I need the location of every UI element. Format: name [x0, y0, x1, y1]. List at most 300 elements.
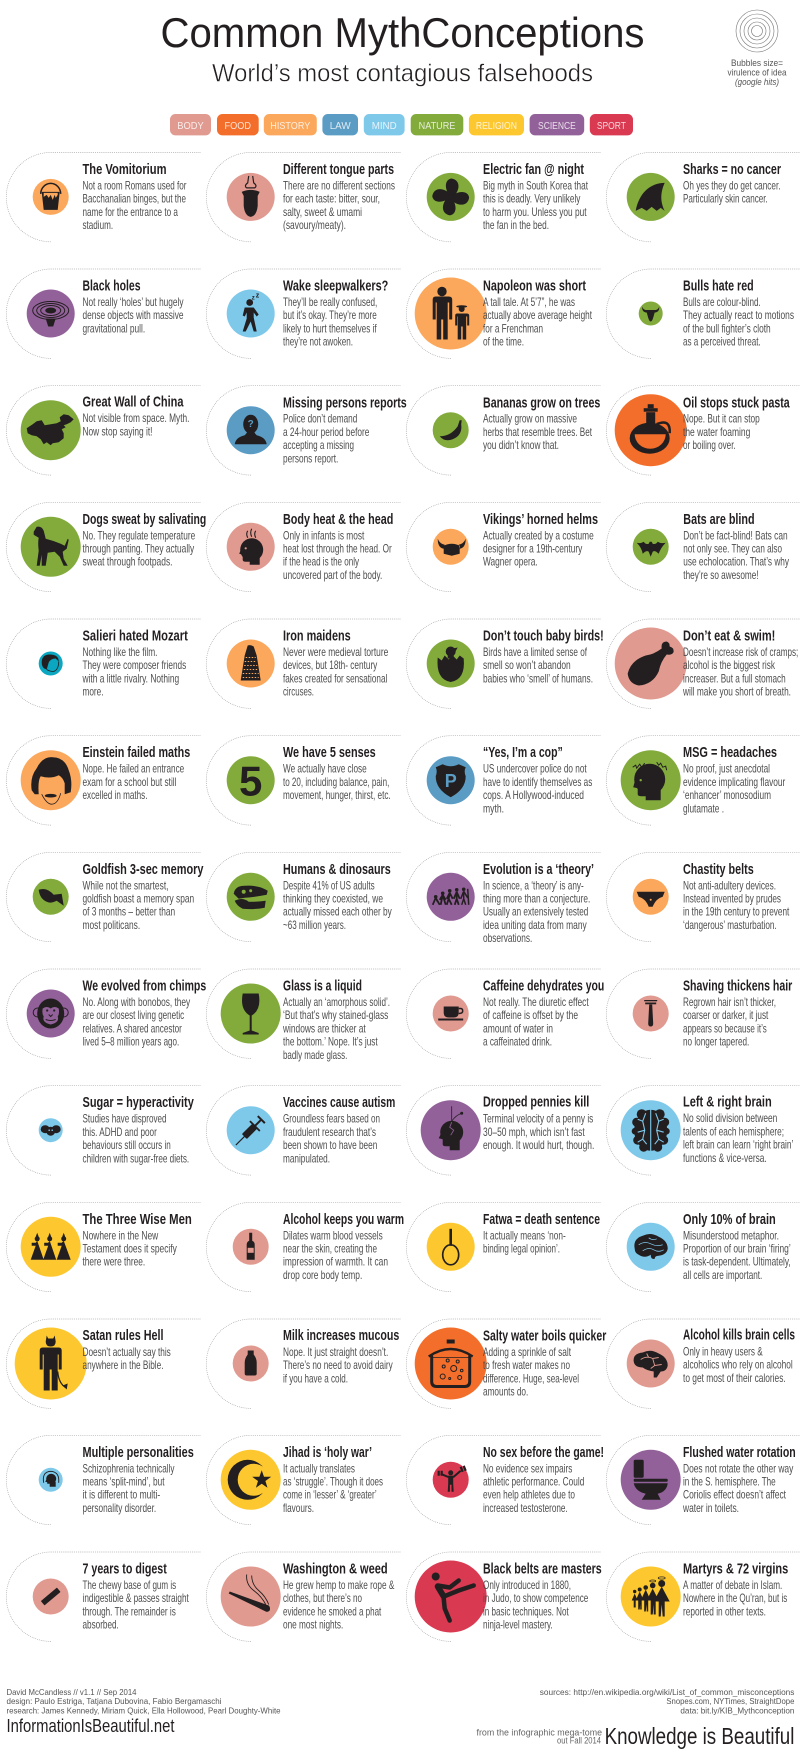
text block: exam for a school but still: [82, 775, 176, 789]
text block: fraudulent research that’s: [283, 1125, 376, 1139]
card: Oil stops stuck pasta: [606, 386, 800, 475]
text block: smell so won’t abandon: [483, 658, 571, 672]
text block: personality disorder.: [82, 1501, 156, 1515]
heading: Caffeine dehydrates you: [483, 978, 604, 994]
icon: toilet: [621, 1450, 681, 1510]
footer: credits: design: Paulo Estriga, Tatjana Dubovina, Fabio Bergamaschi: [6, 1696, 222, 1706]
text block: difference. Huge, sea-level: [483, 1371, 579, 1385]
card: 7 years to digest: [6, 1552, 201, 1641]
text block: Bacchanalian binges, but the: [82, 192, 186, 206]
icon: sleepwalker: z: [252, 296, 255, 302]
text block: increased testosterone.: [483, 1501, 568, 1515]
icon: noose: [427, 1223, 475, 1271]
text block: come in ‘lesser’ & ‘greater’: [283, 1488, 377, 1502]
text block: to 20, including balance, pain,: [283, 775, 389, 789]
text block: [683, 178, 780, 206]
text block: Groundless fears based on: [283, 1112, 380, 1126]
text block: they’re not awoken.: [283, 335, 353, 349]
text block: clothes, but there’s no: [283, 1591, 362, 1605]
footer: site name: InformationIsBeautiful.net: [6, 1716, 174, 1736]
card: We have 5 senses: [206, 736, 401, 825]
text block: likely to hurt themselves if: [283, 321, 377, 335]
card: Dogs sweat by salivating: [6, 502, 206, 592]
icon: black hole: [27, 290, 75, 338]
heading: Salty water boils quicker: [483, 1328, 606, 1344]
text block: [82, 1112, 189, 1165]
heading: Black belts are masters: [483, 1560, 602, 1578]
card: Humans & dinosaurs: [206, 852, 401, 942]
text block: excelled in maths.: [82, 788, 148, 802]
text block: There are no different sections: [283, 178, 395, 192]
text block: Bulls are colour-blind.: [683, 295, 761, 309]
heading: Body heat & the head: [283, 511, 393, 528]
title: Common MythConceptions: [160, 9, 644, 56]
text block: Not really ‘holes’ but hugely: [82, 295, 184, 309]
icon: aching head: [621, 750, 681, 810]
text block: Usually an extensively tested: [483, 905, 588, 919]
heading: Wake sleepwalkers?: [283, 278, 388, 294]
text block: There’s no need to avoid dairy: [283, 1358, 393, 1372]
text block: the fan in the bed.: [483, 218, 549, 232]
heading: Different tongue parts: [283, 161, 394, 178]
text block: for each taste: bitter, sour,: [283, 192, 380, 206]
text block: [683, 762, 785, 815]
legend: bubble size: [728, 10, 787, 88]
heading: We evolved from chimps: [82, 978, 206, 994]
text block: [82, 1345, 171, 1372]
text block: but it’s okay. They’re more: [283, 308, 377, 322]
text block: myth.: [483, 801, 504, 815]
card: Evolution is a 'theory': [406, 852, 601, 945]
text block: goldfish boast a memory span: [82, 891, 194, 905]
text block: more.: [82, 685, 104, 699]
text block: Nope. It just straight doesn’t.: [283, 1345, 388, 1359]
icon: evolution of man: [427, 873, 475, 921]
card: Flushed water rotation: [606, 1435, 800, 1525]
card: Don't eat & swim!: [606, 619, 800, 708]
heading: “Yes, I’m a cop”: [483, 744, 563, 761]
text block: if the head is the only: [283, 555, 359, 569]
text block: a 24-hour period before: [283, 425, 370, 439]
heading: Electric fan @ night: [483, 161, 584, 178]
heading: The Three Wise Men: [82, 1211, 192, 1228]
text block: actually above average height: [483, 308, 592, 322]
text block: lived 5–8 million years ago.: [82, 1035, 179, 1049]
text block: Wagner opera.: [483, 555, 538, 569]
text block: movement, hunger, thirst, etc.: [283, 788, 391, 802]
text block: binding legal opinion’.: [483, 1242, 560, 1256]
heading: Salieri hated Mozart: [82, 628, 188, 644]
text block: no longer tapered.: [683, 1035, 749, 1049]
text block: They were composer friends: [82, 658, 186, 672]
category legend: SCIENCE: [538, 120, 576, 132]
icon: chimp face: [27, 990, 75, 1038]
card: Electric fan @ night: [406, 152, 601, 242]
text block: babies who ‘smell’ of humans.: [483, 671, 593, 685]
icon: banana: [433, 412, 469, 448]
heading: Humans & dinosaurs: [283, 861, 391, 878]
text block: Nope. But it can stop: [683, 412, 760, 426]
icon: crescent and star: [221, 1450, 281, 1510]
text block: Actually created by a costume: [483, 528, 594, 542]
heading: Dropped pennies kill: [483, 1094, 589, 1111]
heading: Bananas grow on trees: [483, 394, 600, 411]
text block: you didn’t know that.: [483, 438, 559, 452]
text block: sweat through footpads.: [82, 555, 172, 569]
card: Different tongue parts: [206, 152, 401, 242]
icon: brain with cracks: [627, 1340, 675, 1388]
text block: [82, 178, 187, 232]
text block: near the skin, creating the: [283, 1242, 377, 1256]
text block: in basic techniques. Not: [483, 1604, 569, 1618]
text block: through. The remainder is: [82, 1604, 176, 1618]
category legend: MIND: [372, 120, 397, 132]
footer: sources: [540, 1687, 795, 1716]
text block: Only introduced in 1880,: [483, 1578, 571, 1592]
text block: Now stop saying it!: [82, 424, 152, 438]
footer: credits: research: James Kennedy, Miriam Quick, Ella Hollowood, Pearl Doughty-White: [6, 1706, 281, 1716]
text block: drop core body temp.: [283, 1268, 362, 1282]
text block: [683, 295, 794, 349]
icon: wine bottle: [233, 1229, 269, 1265]
text block: [283, 295, 377, 349]
icon: head with heat: [227, 523, 275, 571]
text block: [683, 1228, 791, 1282]
text block: through panting. They actually: [82, 541, 194, 555]
icon: devil figure: [15, 1328, 87, 1400]
category legend: LAW: [330, 120, 351, 132]
text block: Nowhere in the New: [82, 1228, 158, 1242]
text block: cops. A Hollywood-induced: [483, 788, 584, 802]
text block: [283, 878, 392, 932]
icon: tongue: [227, 173, 275, 221]
category legend: HISTORY: [270, 120, 310, 132]
text block: It actually means ‘non-: [483, 1228, 566, 1242]
icon: head struck by penny: [421, 1100, 481, 1160]
subtitle: World’s most contagious falsehoods: [212, 60, 593, 88]
text block: [483, 412, 592, 452]
icon: chicken leg: [615, 628, 687, 700]
text block: in Judo, to show competence: [483, 1591, 589, 1605]
icon: line of virgins: [621, 1566, 681, 1626]
text block: (savoury/meaty).: [283, 218, 346, 232]
heading: The Vomitorium: [82, 161, 166, 178]
icon: unknown person: ?: [248, 419, 254, 430]
icon: sleepwalker: z: [256, 292, 260, 300]
text block: name for the entrance to a: [82, 205, 178, 219]
text block: [483, 878, 590, 945]
text block: thing more than a conjecture.: [483, 891, 590, 905]
text block: [82, 295, 184, 335]
icon: number five: [227, 756, 275, 805]
text block: [283, 1112, 380, 1165]
text block: Dilates warm blood vessels: [283, 1228, 383, 1242]
icon: map of China: [21, 400, 81, 460]
text block: [682, 1461, 793, 1515]
text block: Actually grow on massive: [483, 412, 577, 426]
card: Goldfish 3-sec memory: [6, 852, 204, 942]
text block: No. Along with bonobos, they: [82, 995, 190, 1009]
text block: idea uniting data from many: [483, 918, 587, 932]
text block: It actually translates: [283, 1461, 355, 1475]
text block: of 3 months – better than: [82, 905, 175, 919]
heading: Fatwa = death sentence: [483, 1211, 600, 1228]
text block: heat lost through the head. Or: [283, 541, 392, 555]
heading: Sugar = hyperactivity: [82, 1094, 194, 1111]
text block: [82, 528, 195, 569]
heading: Vaccines cause autism: [283, 1094, 395, 1111]
card: The Vomitorium: [6, 152, 201, 242]
footer: credits: David McCandless // v1.1 // Sep 2014: [6, 1687, 137, 1697]
icon: man and short man: [415, 278, 487, 350]
heading: Vikings’ horned helms: [483, 511, 598, 528]
text block: thinking they coexisted, we: [283, 891, 383, 905]
text block: Nope. He failed an entrance: [82, 762, 184, 776]
card: The Three Wise Men: [6, 1202, 201, 1292]
text block: [683, 528, 789, 582]
text block: been shown to have been: [283, 1138, 377, 1152]
icon: bull head: [639, 302, 663, 326]
text block: [283, 1345, 393, 1385]
text block: No. They regulate temperature: [82, 528, 195, 542]
card: Great Wall of China: [6, 386, 201, 475]
icon: police badge: P: [445, 771, 457, 791]
text block: amount of water in: [483, 1021, 553, 1035]
heading: Glass is a liquid: [283, 978, 362, 994]
text block: [483, 1228, 566, 1256]
icon: chastity belt: [633, 879, 669, 915]
text block: for a Frenchman: [483, 321, 543, 335]
text block: all cells are important.: [683, 1268, 762, 1282]
text block: as a perceived threat.: [683, 335, 761, 349]
heading: Chastity belts: [683, 861, 754, 878]
text block: this. ADHD and poor: [82, 1125, 157, 1139]
text block: Not really. The diuretic effect: [483, 995, 589, 1009]
heading: Einstein failed maths: [82, 744, 190, 761]
icon: chewing gum: [33, 1578, 69, 1614]
text block: even help athletes due to: [483, 1488, 575, 1502]
card: Sharks = no cancer: [606, 152, 800, 242]
text block: [82, 1578, 189, 1632]
text block: [683, 1578, 787, 1618]
text block: absorbed.: [82, 1618, 119, 1632]
text block: evidence he smoked a phat: [283, 1604, 382, 1618]
text block: this is deadly. Very unlikely: [483, 192, 580, 206]
text block: functions & vice-versa.: [683, 1151, 767, 1165]
category legend: RELIGION: [476, 120, 517, 132]
text block: [283, 1578, 394, 1632]
icon: three wise men: [21, 1217, 81, 1277]
text block: [483, 1578, 589, 1632]
card: Dropped pennies kill: [406, 1086, 601, 1175]
icon: razor: [633, 996, 669, 1032]
icon: dog: [21, 517, 81, 577]
text block: [483, 1345, 579, 1399]
icon: coffee cup: [433, 996, 469, 1032]
heading: Napoleon was short: [483, 278, 586, 294]
card: Alcohol kills brain cells: [606, 1319, 800, 1408]
text block: with a little rivalry. Nothing: [82, 671, 179, 685]
icon: wine glass: [221, 984, 281, 1044]
text block: reported in other texts.: [683, 1604, 766, 1618]
icon: milk bottle: [233, 1346, 269, 1382]
text block: designer for a 19th-century: [483, 541, 582, 555]
text block: water in toilets.: [682, 1501, 739, 1515]
heading: Jihad is ‘holy war’: [283, 1444, 372, 1461]
icon: Einstein: [21, 750, 81, 810]
text block: herbs that resemble trees. Bet: [483, 425, 592, 439]
text block: actually missed each other by: [283, 905, 392, 919]
text block: Not visible from space. Myth.: [82, 411, 190, 425]
card: Vaccines cause autism: [206, 1086, 401, 1175]
text block: glutamate .: [683, 801, 724, 815]
text block: to fresh water makes no: [483, 1358, 570, 1372]
heading: Multiple personalities: [82, 1444, 194, 1461]
icon: bat: [633, 529, 669, 565]
icon: oil jar: [615, 394, 687, 466]
icon: iron maiden: [227, 640, 275, 688]
icon: number five: 5: [239, 758, 262, 805]
card: Glass is a liquid: [206, 969, 401, 1062]
text block: observations.: [483, 931, 532, 945]
text block: US undercover police do not: [483, 762, 587, 776]
card: Salty water boils quicker: [406, 1319, 606, 1408]
card: Vikings' horned helms: [406, 502, 601, 592]
text block: relatives. A shared ancestor: [82, 1021, 182, 1035]
text block: gravitational pull.: [82, 321, 145, 335]
category legend: BODY: [177, 120, 204, 132]
heading: Milk increases mucous: [283, 1327, 399, 1344]
text block: [283, 1228, 388, 1282]
heading: Goldfish 3-sec memory: [82, 861, 204, 878]
category legend: FOOD: [225, 120, 251, 132]
heading: Don’t touch baby birds!: [483, 628, 604, 644]
text block: Doesn’t actually say this: [82, 1345, 171, 1359]
icon: brain hemispheres: [621, 1100, 681, 1160]
card: Alcohol keeps you warm: [206, 1202, 404, 1292]
icon: weightlifter: [433, 1462, 469, 1498]
icon: karate kick: [415, 1560, 487, 1632]
text block: they’re so awesome!: [683, 568, 759, 582]
text block: [683, 1344, 793, 1385]
text block: Not a room Romans used for: [82, 178, 187, 192]
text block: [82, 878, 194, 932]
text block: one most nights.: [283, 1618, 343, 1632]
text block: No evidence sex impairs: [483, 1461, 572, 1475]
card: We evolved from chimps: [6, 969, 206, 1058]
text block: of the time.: [483, 335, 524, 349]
text block: We actually have close: [283, 762, 367, 776]
card: Body heat & the head: [206, 502, 401, 592]
text block: [283, 178, 395, 232]
text block: [82, 762, 184, 802]
icon: viking helmet: [433, 529, 469, 565]
text block: windows are thicker at: [282, 1021, 366, 1035]
heading: Evolution is a ‘theory’: [483, 861, 594, 878]
text block: [283, 762, 391, 802]
text block: manipulated.: [283, 1151, 330, 1165]
text block: Never were medieval torture: [283, 645, 389, 659]
text block: behaviours still occurs in: [82, 1138, 171, 1152]
text block: Actually an ‘amorphous solid’.: [283, 995, 390, 1009]
card: Don't touch baby birds!: [406, 619, 604, 708]
card: Sugar = hyperactivity: [6, 1086, 201, 1175]
text block: [483, 1112, 594, 1152]
text block: ninja-level mastery.: [483, 1618, 553, 1632]
text block: it is different to multi-: [82, 1488, 160, 1502]
card: Left & right brain: [606, 1086, 800, 1175]
text block: They’ll be really confused,: [283, 295, 377, 309]
card: "Yes, I'm a cop": [406, 736, 601, 825]
text block: [483, 995, 589, 1049]
text block: Only in infants is most: [283, 528, 365, 542]
footer: book note: from the infographic mega-tome: [476, 1728, 602, 1738]
heading: Great Wall of China: [82, 394, 184, 411]
text block: if you have a cold.: [283, 1371, 348, 1385]
card: Black belts are masters: [406, 1552, 602, 1641]
icon: smoking joint: [221, 1566, 281, 1626]
icon: hyperactive face: [39, 1118, 63, 1142]
card: Missing persons reports: [206, 386, 407, 475]
text block: the bottom.’ Nope. It’s just: [283, 1035, 378, 1049]
icon: bucket: [33, 179, 69, 215]
icon: head in head: [39, 1468, 63, 1492]
heading: We have 5 senses: [283, 744, 376, 761]
text block: flavours.: [283, 1501, 314, 1515]
card: Bats are blind: [606, 502, 800, 592]
text block: Nothing like the film.: [82, 645, 158, 659]
text block: Schizophrenia technically: [82, 1461, 175, 1475]
card: Black holes: [6, 269, 201, 358]
text block: [82, 995, 190, 1049]
text block: [282, 995, 390, 1062]
text block: The chewy base of gum is: [82, 1578, 176, 1592]
card: Multiple personalities: [6, 1435, 201, 1525]
card: Martyrs & 72 virgins: [606, 1552, 800, 1641]
text block: to harm you. Unless you put: [483, 205, 587, 219]
card: Caffeine dehydrates you: [406, 969, 604, 1058]
text block: there were three.: [82, 1255, 145, 1269]
icon: sleepwalker: [227, 290, 275, 338]
icon: unknown person: [227, 406, 275, 454]
footer: book note: [476, 1723, 794, 1749]
text block: [82, 1461, 175, 1515]
text block: as ‘struggle’. Though it does: [283, 1475, 383, 1489]
card: Salieri hated Mozart: [6, 619, 201, 708]
heading: Black holes: [82, 278, 140, 294]
text block: accepting a missing: [283, 438, 354, 452]
card: Milk increases mucous: [206, 1319, 401, 1408]
text block: are our closest living genetic: [82, 1008, 184, 1022]
heading: Washington & weed: [283, 1560, 388, 1578]
text block: [283, 645, 389, 699]
card: No sex before the game!: [406, 1435, 604, 1525]
text block: devices, but 18th- century: [283, 658, 377, 672]
text block: indigestible & passes straight: [82, 1591, 189, 1605]
card: Only 10% of brain: [606, 1202, 800, 1292]
text block: [483, 645, 593, 685]
text block: Terminal velocity of a penny is: [483, 1112, 593, 1126]
footer: book note: out Fall 2014: [557, 1736, 601, 1746]
text block: Police don’t demand: [283, 412, 357, 426]
text block: [483, 1461, 584, 1515]
heading: Missing persons reports: [283, 394, 407, 411]
icon: Salieri portrait: [39, 652, 63, 676]
category legend: NATURE: [419, 120, 455, 132]
text block: [82, 645, 186, 699]
text block: [82, 1228, 177, 1269]
heading: Satan rules Hell: [82, 1327, 164, 1344]
